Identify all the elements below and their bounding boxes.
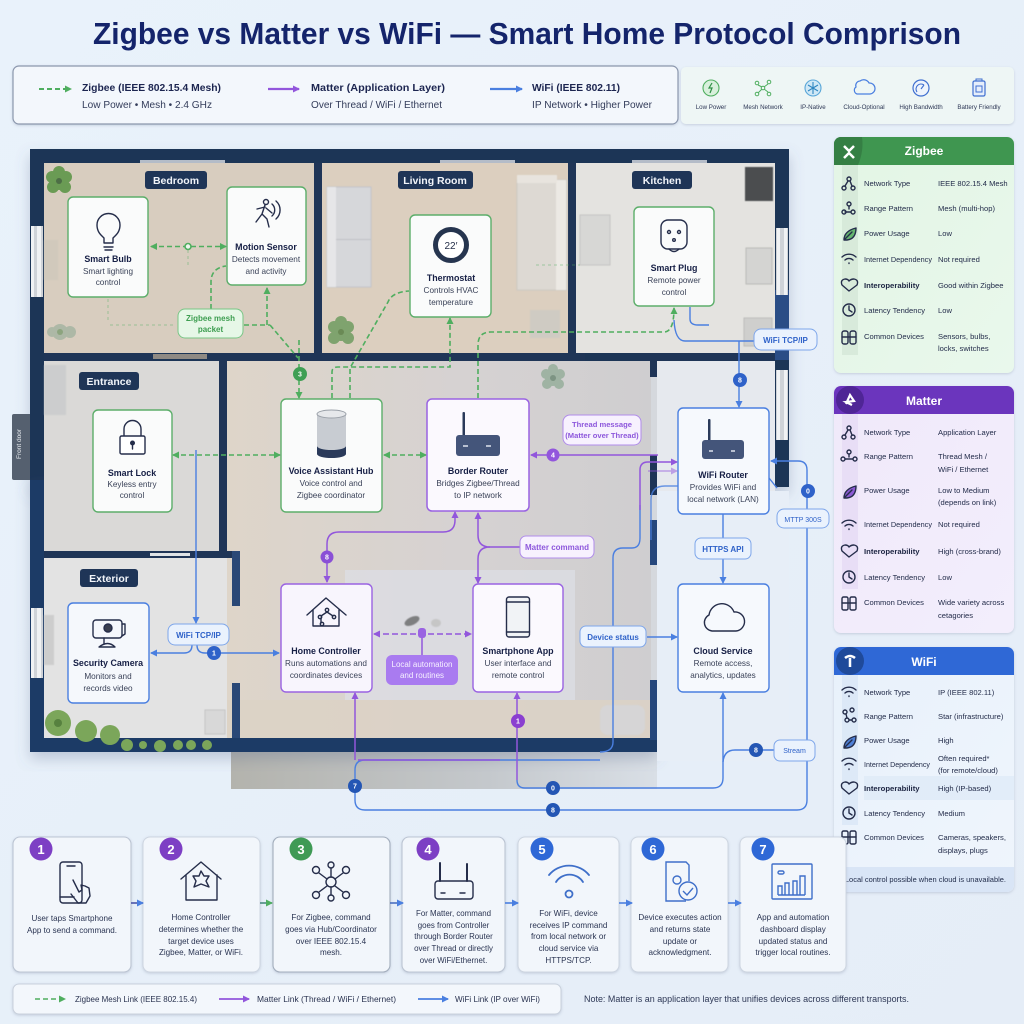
step 4 (402, 837, 505, 972)
label: matter command: Matter command (525, 543, 589, 552)
step 2: target device uses (168, 937, 234, 946)
label: wifi tcp/ip top (754, 329, 817, 350)
icon: document check (666, 862, 697, 901)
zigbee rows: Internet Dependency (864, 255, 932, 264)
process steps (13, 837, 846, 972)
label: wifi tcp/ip left: WiFi TCP/IP (176, 631, 222, 640)
panel: matter (834, 386, 1014, 633)
card: motion sensor: and activity (246, 267, 287, 276)
wifi rows: Common Devices (864, 833, 924, 842)
card: security camera: Monitors and (84, 672, 132, 681)
matter rows: Low to Medium (938, 486, 990, 495)
badge: step 0 stream: 8 (754, 748, 758, 754)
card: smart plug (634, 207, 714, 306)
step 6 (631, 837, 728, 972)
legend item: wifi link (418, 994, 540, 1004)
step 6: update or (663, 937, 697, 946)
wifi rows (864, 688, 1014, 855)
badge: step 8 bottom (546, 803, 560, 817)
zigbee rows: Low (938, 229, 952, 238)
matter header: Matter (906, 394, 942, 408)
card: home controller: Runs automations and (285, 659, 367, 668)
matter rows: Interoperability (864, 547, 920, 556)
matter rows (864, 428, 1004, 620)
bottom link legend (13, 984, 561, 1014)
connections: wifi (151, 307, 815, 817)
zigbee rows: Good within Zigbee (938, 281, 1003, 290)
label: living room: Living Room (403, 175, 467, 187)
room labels (79, 171, 692, 587)
label: exterior (80, 569, 138, 587)
badge: step 3: 3 (298, 372, 302, 378)
icon: motion (256, 200, 280, 227)
label: wifi tcp/ip top: WiFi TCP/IP (763, 336, 809, 345)
icon: ip-native: IP-Native (800, 104, 826, 111)
matter rows: Power Usage (864, 486, 910, 495)
connections: matter (320, 448, 677, 780)
legend: zigbee: Zigbee (IEEE 802.15.4 Mesh) (82, 83, 221, 94)
step 2 (143, 837, 260, 972)
step 2: Zigbee, Matter, or WiFi. (159, 948, 243, 957)
label: bedroom (145, 171, 207, 189)
protocol legend panel (13, 66, 678, 124)
step 4: For Matter, command (416, 909, 491, 918)
card: home controller: coordinates devices (290, 671, 362, 680)
card: smartphone app (473, 584, 563, 692)
icon: mesh network (743, 80, 784, 111)
card: security camera: Security Camera (73, 658, 143, 668)
card: border router: Bridges Zigbee/Thread (436, 479, 520, 488)
matter icons (841, 426, 858, 610)
step 6: 6 (649, 842, 657, 857)
label: mttp 300s: MTTP 300S (784, 517, 822, 524)
card: smartphone app: remote control (492, 671, 544, 680)
card: security camera: records video (83, 684, 133, 693)
step 4: through Border Router (414, 932, 493, 941)
card: cloud service: Cloud Service (693, 646, 753, 656)
card: cloud service (678, 584, 769, 692)
zigbee rows (864, 179, 1008, 353)
card: cloud service: analytics, updates (690, 671, 756, 680)
badge: step 7 (348, 779, 362, 793)
wifi rows: High (IP-based) (938, 784, 992, 793)
icon: lock (120, 420, 145, 454)
label: thread message (563, 415, 641, 445)
icon: house mesh (307, 598, 346, 626)
zigbee rows: locks, switches (938, 344, 989, 353)
icon: mesh network: Mesh Network (743, 104, 784, 111)
legend: matter (268, 83, 445, 111)
step 3: mesh. (320, 948, 342, 957)
card: voice assistant hub (281, 399, 382, 512)
card: motion sensor (227, 187, 306, 285)
icon: router (702, 419, 744, 459)
step 3: over IEEE 802.15.4 (296, 937, 367, 946)
icon: mesh star (312, 862, 350, 901)
zigbee icons (841, 177, 858, 344)
icon: wifi (549, 866, 589, 898)
icon: battery friendly: Battery Friendly (957, 104, 1002, 111)
zigbee header: Zigbee (905, 144, 944, 158)
connections: zigbee (108, 244, 674, 455)
floors (30, 149, 789, 761)
icon: phone tap (60, 862, 90, 903)
card: smart lock: control (120, 491, 144, 500)
step 3: For Zigbee, command (291, 913, 371, 922)
card: smartphone app: User interface and (485, 659, 552, 668)
step 4: 4 (424, 842, 432, 857)
matter rows: Low (938, 573, 952, 582)
label: zigbee mesh packet: packet (198, 325, 224, 334)
card: smart plug: control (662, 288, 686, 297)
step 4: goes from Controller (418, 921, 490, 930)
card: thermostat: Thermostat (427, 273, 475, 283)
patio slab (231, 752, 657, 789)
matter rows: WiFi / Ethernet (938, 465, 989, 474)
icon: plug (661, 220, 687, 252)
icon: battery friendly (957, 79, 1002, 111)
card: wifi router (678, 408, 769, 514)
matter rows: (depends on link) (938, 498, 997, 507)
step 5: from local network or (531, 932, 606, 941)
wifi rows: Power Usage (864, 736, 910, 745)
card: security camera (68, 603, 149, 703)
matter rows: Common Devices (864, 598, 924, 607)
wifi rows: Internet Dependency (864, 760, 930, 769)
note: Note: Matter is an application layer that unifies devices across different transports. (584, 994, 909, 1004)
wifi rows: Network Type (864, 688, 910, 697)
card: border router (427, 399, 529, 511)
icon: high bandwidth: High Bandwidth (899, 104, 943, 111)
wifi icons (841, 687, 858, 844)
card: home controller: Home Controller (291, 646, 361, 656)
arrows between steps (131, 902, 741, 904)
legend item: matter link: Matter Link (Thread / WiFi / Ethernet) (257, 994, 396, 1004)
step 2: determines whether the (159, 925, 244, 934)
wifi rows: Latency Tendency (864, 809, 925, 818)
zigbee rows: Not required (938, 255, 980, 264)
legend: wifi (490, 83, 653, 111)
card: wifi router: WiFi Router (698, 470, 748, 480)
link labels (168, 309, 829, 761)
legend: zigbee: Low Power • Mesh • 2.4 GHz (82, 100, 212, 111)
card: border router: Border Router (448, 466, 509, 476)
card: smart bulb: Smart Bulb (84, 254, 132, 264)
step 2: 2 (167, 842, 175, 857)
zigbee header (834, 137, 1014, 165)
icon: thermostat dial: 22′ (444, 241, 458, 252)
step 1: User taps Smartphone (32, 914, 113, 923)
step 5: HTTPS/TCP. (545, 956, 592, 965)
card: smart plug: Smart Plug (651, 263, 697, 273)
icon: cloud-optional: Cloud-Optional (843, 104, 885, 111)
furniture (44, 167, 773, 735)
badge: step 0 stream (749, 743, 763, 757)
card: smart lock (93, 410, 172, 512)
icon: home (181, 862, 221, 900)
step 1: 1 (37, 842, 45, 857)
walls (44, 163, 789, 740)
badge: step 0 bottom: 0 (551, 786, 555, 792)
wifi header (834, 647, 1014, 675)
icon: camera (93, 620, 125, 647)
wifi rows: Cameras, speakers, (938, 833, 1006, 842)
zigbee rows: Common Devices (864, 332, 924, 341)
icon: phone (506, 597, 530, 637)
zigbee rows: Interoperability (864, 281, 920, 290)
card: smartphone app: Smartphone App (482, 646, 554, 656)
card: voice assistant hub: Zigbee coordinator (297, 491, 365, 500)
step 3 (273, 837, 390, 972)
label: zigbee mesh packet: Zigbee mesh (186, 314, 235, 323)
label: device status: Device status (587, 633, 639, 642)
matter rows: Wide variety across (938, 598, 1004, 607)
step 7 (740, 837, 846, 972)
wifi rows: High (938, 736, 954, 745)
card: smart bulb (68, 197, 148, 297)
matter header (834, 386, 1014, 414)
label: kitchen: Kitchen (643, 175, 681, 187)
step 7: App and automation (757, 913, 829, 922)
plants (45, 166, 565, 752)
legend: matter: Matter (Application Layer) (311, 83, 445, 94)
badge: step 1 (207, 646, 221, 660)
card: smart bulb: Smart lighting (83, 267, 133, 276)
card: motion sensor: Detects movement (232, 255, 301, 264)
label: local automation (386, 655, 458, 685)
label: matter command (520, 536, 594, 558)
card: smart bulb: control (96, 278, 120, 287)
card: wifi router: local network (LAN) (687, 495, 759, 504)
badge: step 8 purple (320, 550, 334, 564)
label: thread message: (Matter over Thread) (565, 431, 639, 440)
step 6: Device executes action (638, 913, 722, 922)
label: thread message: Thread message (572, 420, 632, 429)
step 4: over Thread or directly (414, 944, 493, 953)
legend: wifi: IP Network • Higher Power (532, 100, 653, 111)
badge: step 7: 7 (353, 784, 357, 790)
step 5: cloud service via (539, 944, 599, 953)
step 6: and returns state (650, 925, 711, 934)
wifi rows: Often required* (938, 754, 990, 763)
card: voice assistant hub: Voice control and (300, 479, 363, 488)
matter rows: Application Layer (938, 428, 997, 437)
label: bedroom: Bedroom (153, 175, 199, 187)
matter rows: Internet Dependency (864, 520, 932, 529)
wifi rows: displays, plugs (938, 846, 988, 855)
wifi rows: Star (infrastructure) (938, 712, 1004, 721)
badge: step 4: 4 (551, 452, 555, 460)
card: home controller (281, 584, 372, 692)
card: motion sensor: Motion Sensor (235, 242, 297, 252)
step 7: dashboard display (760, 925, 827, 934)
badge: step 8 purple: 8 (325, 554, 329, 562)
wifi rows: Interoperability (864, 784, 920, 793)
zigbee rows: IEEE 802.15.4 Mesh (938, 179, 1008, 188)
panel: wifi (834, 647, 1014, 892)
zigbee rows: Sensors, bulbs, (938, 332, 990, 341)
step 7: trigger local routines. (755, 948, 831, 957)
card: cloud service: Remote access, (694, 659, 752, 668)
card: wifi router: Provides WiFi and (690, 483, 757, 492)
windows (31, 160, 788, 678)
badge: step 4 (546, 448, 560, 462)
icon: low power (696, 80, 726, 111)
label: kitchen (632, 171, 692, 189)
wifi rows: (for remote/cloud) (938, 766, 998, 775)
step 1 (13, 837, 131, 972)
badge: step 0 right: 0 (806, 488, 810, 496)
zigbee rows: Network Type (864, 179, 910, 188)
step 7: 7 (759, 842, 767, 857)
label: exterior: Exterior (89, 573, 129, 585)
step 5: receives IP command (530, 921, 607, 930)
icon: cloud-optional (843, 80, 885, 111)
badge: step 0 right (801, 484, 815, 498)
card: thermostat: temperature (429, 298, 474, 307)
badge: step 1 purple: 1 (516, 718, 520, 726)
badge: step x (733, 373, 747, 387)
badge: step x: 8 (738, 378, 742, 384)
step 5 (518, 837, 619, 972)
label: mttp 300s (777, 509, 829, 528)
matter rows: Range Pattern (864, 452, 913, 461)
label: entrance (79, 372, 139, 390)
matter rows: High (cross-brand) (938, 547, 1001, 556)
legend item: wifi link: WiFi Link (IP over WiFi) (455, 994, 540, 1004)
legend item: zigbee link: Zigbee Mesh Link (IEEE 802.15.4) (75, 994, 197, 1004)
card: thermostat: Controls HVAC (424, 286, 479, 295)
icon: hub cylinder (317, 410, 346, 458)
icon: router (456, 412, 500, 456)
zigbee rows: Mesh (multi-hop) (938, 204, 995, 213)
wifi rows: IP (IEEE 802.11) (938, 688, 995, 697)
wifi footnote: *Local control possible when cloud is unavailable. (842, 875, 1006, 884)
label: device status (580, 626, 646, 647)
zigbee rows: Low (938, 306, 952, 315)
matter rows: Thread Mesh / (938, 452, 988, 461)
icon: ip-native (800, 80, 826, 111)
icon: high bandwidth (899, 80, 943, 111)
front door tab (12, 414, 30, 480)
badge: small purple (418, 628, 426, 638)
step 5: 5 (538, 842, 546, 857)
label: https api (695, 538, 751, 559)
label: zigbee mesh packet (178, 309, 243, 338)
icon: router (435, 863, 473, 899)
card: smart lock: Smart Lock (108, 468, 156, 478)
matter rows: Not required (938, 520, 980, 529)
step 3: 3 (297, 842, 305, 857)
label: entrance: Entrance (87, 376, 132, 388)
step 1: App to send a command. (27, 926, 117, 935)
badge: step 8 bottom: 8 (551, 808, 555, 814)
legend: matter: Over Thread / WiFi / Ethernet (311, 100, 442, 111)
card: voice assistant hub: Voice Assistant Hub (289, 466, 374, 476)
matter rows: Network Type (864, 428, 910, 437)
step 7: updated status and (759, 937, 827, 946)
icon: bulb (97, 214, 120, 250)
matter rows: cetagories (938, 611, 973, 620)
wifi footnote (834, 867, 1014, 892)
label: living room (398, 171, 473, 189)
card: smart lock: Keyless entry (107, 480, 157, 489)
title: Zigbee vs Matter vs WiFi — Smart Home Protocol Comprison (93, 17, 961, 51)
zigbee rows: Power Usage (864, 229, 910, 238)
legend: wifi: WiFi (IEEE 802.11) (532, 83, 620, 94)
label: local automation: Local automation (392, 660, 452, 669)
panel: zigbee (834, 137, 1014, 373)
card: smart plug: Remote power (647, 276, 701, 285)
badge: step 0 bottom (546, 781, 560, 795)
step 4: over WiFi/Ethernet. (420, 956, 487, 965)
label: stream: Stream (783, 748, 806, 755)
badge: step 3 (293, 367, 307, 381)
badge: step 1: 1 (212, 650, 216, 658)
card: border router: to IP network (454, 491, 503, 500)
wifi header: WiFi (911, 655, 937, 669)
label: stream (774, 740, 815, 761)
label: https api: HTTPS API (702, 545, 744, 554)
matter rows: Latency Tendency (864, 573, 925, 582)
step 6: acknowledgment. (648, 948, 712, 957)
label: local automation: and routines (400, 671, 444, 680)
badge: step 1 purple (511, 714, 525, 728)
card: thermostat (410, 215, 491, 317)
step 5: For WiFi, device (539, 909, 598, 918)
attribute icons panel (681, 67, 1014, 124)
label: wifi tcp/ip left (168, 624, 229, 645)
zigbee rows: Range Pattern (864, 204, 913, 213)
legend: zigbee (39, 83, 221, 111)
icon: low power: Low Power (696, 104, 726, 111)
icon: cloud (704, 604, 745, 631)
step 2: Home Controller (172, 913, 231, 922)
step 3: goes via Hub/Coordinator (285, 925, 377, 934)
icon: dashboard (772, 864, 812, 899)
front door tab: Front door (16, 428, 23, 459)
zigbee rows: Latency Tendency (864, 306, 925, 315)
wifi rows: Medium (938, 809, 965, 818)
floor plan (12, 149, 789, 789)
device cards (68, 187, 769, 703)
wifi rows: Range Pattern (864, 712, 913, 721)
